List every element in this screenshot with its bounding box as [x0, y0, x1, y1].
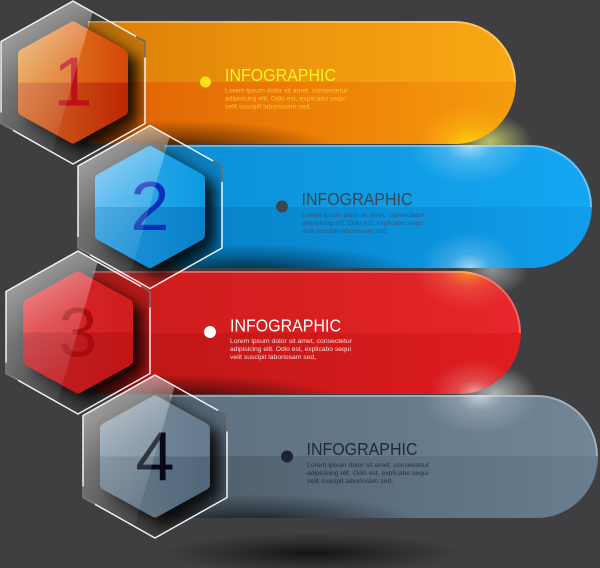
hexagon badge 3	[6, 250, 150, 414]
panel: grey bar	[170, 395, 598, 518]
body 3: Lorem ipsum dolor sit amet, consectetur	[230, 338, 353, 345]
number 4: 4	[136, 418, 174, 496]
body 4: adipisicing elit. Odio est, explicabo sequi	[307, 470, 429, 477]
text block 2	[276, 189, 425, 235]
bullet 3	[204, 326, 216, 338]
number 1: 1	[54, 42, 92, 120]
panel: blue bar	[165, 145, 592, 268]
panel: orange bar	[88, 21, 516, 144]
bullet 2	[276, 200, 288, 212]
text block 4	[281, 439, 430, 485]
number 2: 2	[131, 167, 169, 245]
body 2: adipisicing elit. Odio est, explicabo sequi	[302, 220, 424, 227]
panel: red bar	[93, 271, 521, 394]
hexagon badge 4	[83, 374, 227, 538]
body 1: Lorem ipsum dolor sit amet, consectetur	[225, 88, 348, 94]
bullet 1	[200, 76, 211, 88]
hexagon badge 2	[78, 125, 222, 289]
body 3: velit suscipit laboriosam sed,	[230, 354, 316, 361]
body 4: Lorem ipsum dolor sit amet, consectetur	[307, 462, 430, 469]
heading 2: INFOGRAPHIC	[302, 189, 412, 209]
bullet 4	[281, 450, 293, 462]
body 2: velit suscipit laboriosam sed,	[302, 228, 388, 235]
text block 3	[204, 316, 353, 361]
body 4	[307, 462, 430, 485]
heading 3: INFOGRAPHIC	[230, 316, 341, 336]
text block 1	[200, 65, 348, 110]
body 4: velit suscipit laboriosam sed,	[307, 478, 393, 485]
number 3: 3	[59, 294, 97, 372]
body 2: Lorem ipsum dolor sit amet, consectetur	[302, 212, 425, 219]
body 1	[225, 88, 348, 110]
floor shadow	[162, 533, 462, 568]
hexagon badge 1	[1, 0, 145, 164]
body 3: adipisicing elit. Odio est, explicabo sequi	[230, 346, 352, 353]
body 3	[230, 338, 353, 361]
heading 4: INFOGRAPHIC	[306, 439, 418, 459]
light glow behind bars	[448, 114, 537, 422]
heading 1: INFOGRAPHIC	[225, 65, 336, 85]
body 1: adipisicing elit. Odio est, explicabo sequi	[225, 96, 347, 102]
body 2	[302, 212, 425, 235]
body 1: velit suscipit laboriosam sed,	[225, 104, 311, 110]
